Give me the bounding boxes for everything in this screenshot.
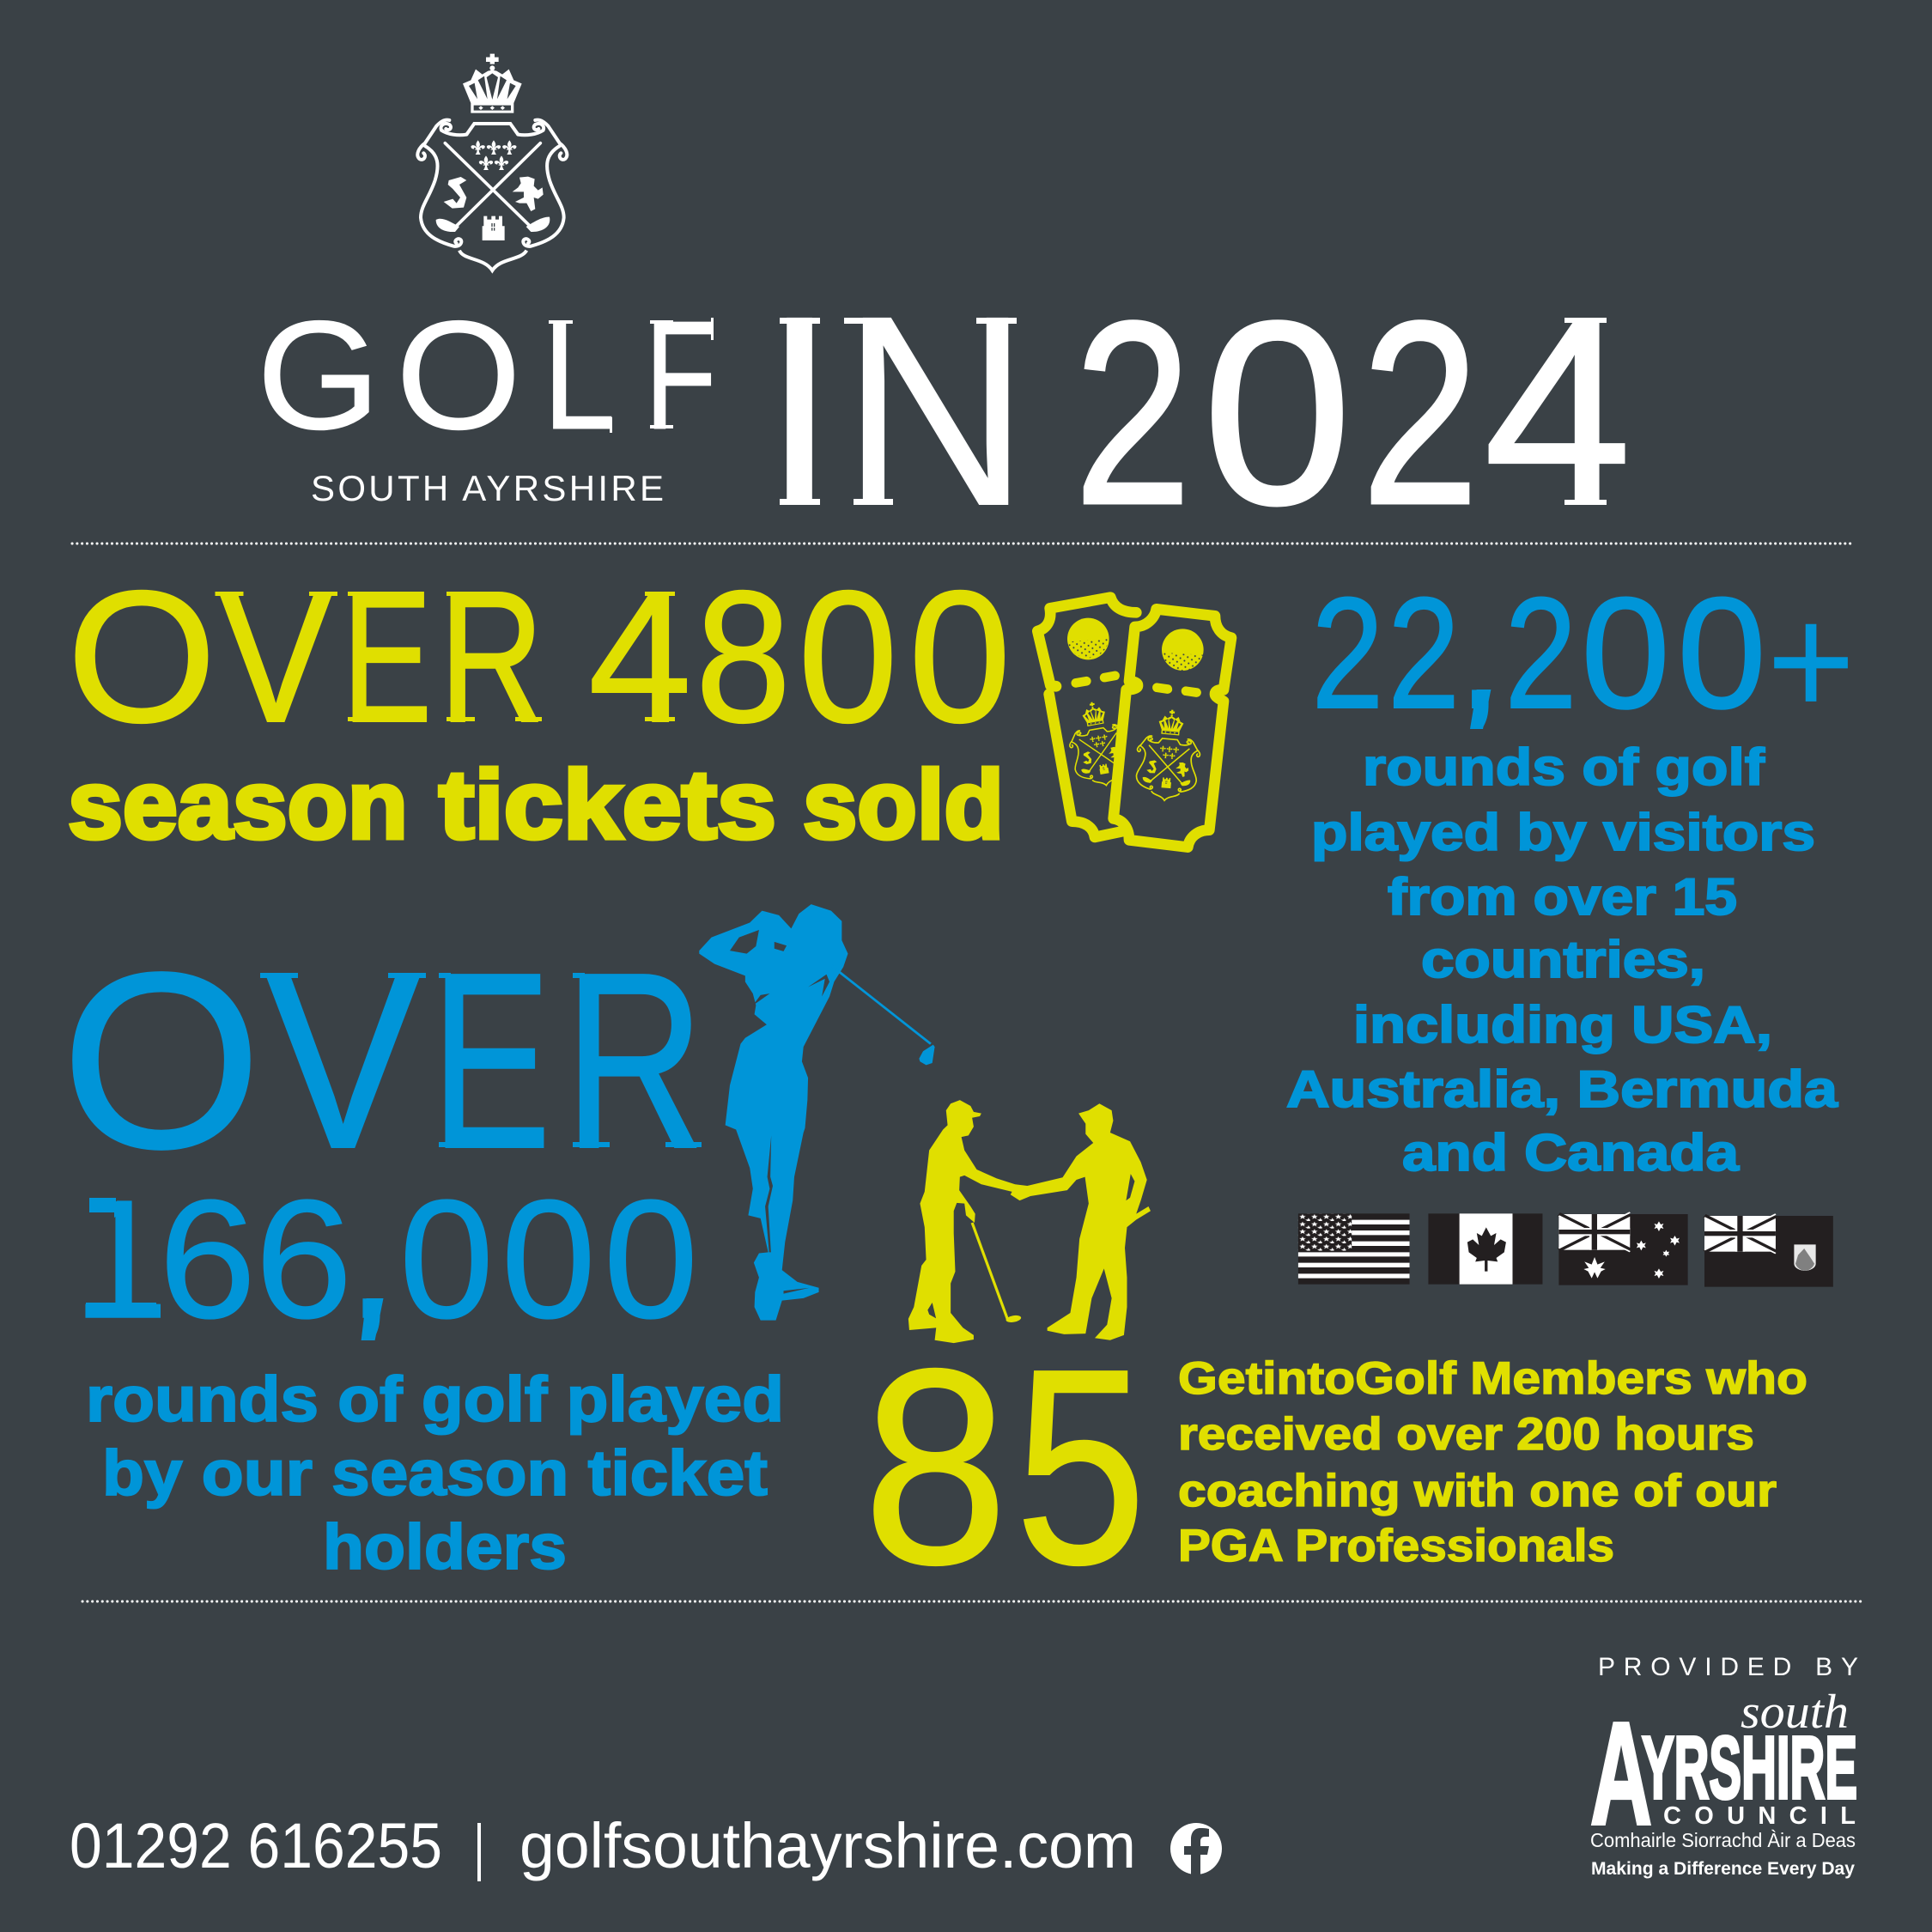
- headline: over: V: [265, 920, 422, 1200]
- headline: over 4800: O: [67, 553, 216, 762]
- headline: over: E: [431, 920, 551, 1200]
- caption: visitor rounds of golf: and Canada: [1402, 1124, 1740, 1182]
- headline: over 4800: R: [440, 553, 544, 762]
- caption: season tickets sold: season: [68, 750, 408, 859]
- stat: getintogolf coaching: [863, 1311, 1807, 1622]
- logo word: council: COUNCIL: [1663, 1802, 1856, 1830]
- gaelic name: Comhairle Siorrachd Àir a Deas: [1590, 1829, 1856, 1851]
- caption: visitor rounds of golf: countries,: [1421, 931, 1705, 988]
- caption: visitor rounds of golf: rounds of golf: [1363, 738, 1765, 796]
- caption: rounds played by season ticket holders: by our season ticket: [102, 1437, 768, 1509]
- flag: Australia: [1558, 1212, 1688, 1285]
- caption: getintogolf members: GetintoGolf Members who: [1178, 1353, 1807, 1404]
- slogan: Making a Difference Every Day: [1591, 1859, 1855, 1879]
- caption: visitor rounds of golf: from over 15: [1388, 868, 1737, 926]
- headline: 22,200+: 2: [1504, 564, 1577, 741]
- title logo: Golf South Ayrshire: [257, 289, 717, 508]
- ticket: front: [1114, 609, 1231, 848]
- headline: over: R: [564, 920, 705, 1200]
- logo word: GOLF: O: [396, 289, 521, 462]
- headline number: 166,000: [73, 1165, 698, 1353]
- flag: USA: [1298, 1213, 1410, 1285]
- flag: Bermuda: [1704, 1214, 1833, 1287]
- caption: season tickets sold: tickets: [439, 750, 776, 859]
- caption: rounds played by season ticket holders: rounds of golf played: [86, 1364, 784, 1435]
- headline number: 166,000: 0: [501, 1165, 596, 1353]
- title year: 2024: [1074, 268, 1631, 559]
- headline: 22,200+: 2: [1312, 564, 1383, 741]
- title year: 2024: 0: [1202, 268, 1352, 559]
- logo word: GOLF: L: [543, 289, 616, 462]
- illustration: woman golfer silhouette: [699, 904, 935, 1321]
- logo word: GOLF: F: [645, 289, 717, 462]
- label: provided by: PROVIDED BY: [1598, 1653, 1858, 1681]
- headline number: 166,000: 1: [73, 1165, 168, 1353]
- icon: facebook: [1170, 1823, 1222, 1874]
- headline: over 4800: 4: [588, 553, 691, 762]
- logo subtitle: SOUTH AYRSHIRE: [311, 468, 664, 508]
- caption: getintogolf members: PGA Professionals: [1178, 1521, 1614, 1571]
- stat: season ticket rounds: [61, 920, 784, 1583]
- caption: visitor rounds of golf: Australia, Bermuda: [1286, 1060, 1838, 1118]
- caption: rounds played by season ticket holders: holders: [323, 1511, 567, 1583]
- caption: visitor rounds of golf: played by visitors: [1311, 804, 1815, 861]
- headline: over 4800: 0: [799, 553, 898, 762]
- flag: Canada: [1428, 1213, 1542, 1285]
- title year: 2024: 4: [1484, 268, 1631, 559]
- headline number: 166,000: ,: [348, 1165, 394, 1353]
- flags row: [1298, 1212, 1833, 1287]
- caption: season tickets sold: [68, 750, 1004, 859]
- caption: visitor rounds of golf: including USA,: [1353, 996, 1772, 1054]
- headline: 22,200+: [1312, 564, 1856, 749]
- headline: 22,200+: +: [1767, 572, 1856, 749]
- caption: rounds played by season ticket holders: [86, 1364, 784, 1583]
- caption: getintogolf members: [1178, 1353, 1807, 1571]
- title word: IN: N: [841, 259, 1030, 563]
- title year: 2024: 2: [1362, 268, 1479, 559]
- icon: two season tickets: [1037, 598, 1231, 848]
- icon: golf south ayrshire crest: [417, 54, 567, 270]
- website: golfsouthayrshire.com: [519, 1810, 1136, 1881]
- headline number: 166,000: 0: [399, 1165, 494, 1353]
- headline number: 166,000: 6: [159, 1165, 256, 1353]
- stat: season tickets: [67, 553, 1011, 859]
- logo word: south: south: [1741, 1686, 1849, 1739]
- caption: season tickets sold: sold: [803, 750, 1004, 859]
- stat: visitor rounds: [1286, 564, 1856, 1182]
- logo word: GOLF: [257, 289, 717, 462]
- headline: 22,200+: 0: [1677, 564, 1766, 741]
- headline: over 4800: 0: [908, 553, 1011, 762]
- headline: over 4800: [67, 553, 1011, 762]
- caption: visitor rounds of golf: [1286, 738, 1838, 1182]
- headline: 22,200+: 0: [1581, 564, 1670, 741]
- title: in 2024: [762, 259, 1631, 563]
- headline: 22,200+: ,: [1458, 564, 1502, 741]
- phone number: 01292 616255: [70, 1810, 442, 1881]
- headline: over 4800: E: [342, 553, 432, 762]
- title year: 2024: 2: [1074, 268, 1192, 559]
- title word: IN: I: [762, 259, 837, 563]
- logo letter: large A: A: [1590, 1692, 1652, 1856]
- headline: over: [61, 920, 705, 1200]
- ticket: back: [1037, 598, 1136, 837]
- logo word: GOLF: G: [257, 289, 380, 462]
- separator: [477, 1823, 481, 1881]
- headline number: 166,000: 0: [604, 1165, 698, 1353]
- caption: getintogolf members: received over 200 hours: [1178, 1409, 1754, 1460]
- headline: 22,200+: 2: [1388, 564, 1460, 741]
- headline: over: O: [61, 920, 262, 1200]
- caption: getintogolf members: coaching with one of our: [1178, 1466, 1777, 1516]
- title word: IN: [762, 259, 1030, 563]
- number: 85: [863, 1311, 1146, 1622]
- footer contact details: [70, 1810, 1222, 1881]
- headline: over 4800: V: [219, 553, 332, 762]
- number: 85: 8: [863, 1311, 1008, 1622]
- headline: over 4800: 8: [696, 553, 791, 762]
- provider: South Ayrshire Council logo: [1590, 1653, 1858, 1879]
- number: 85: 5: [1015, 1311, 1146, 1622]
- headline number: 166,000: 6: [255, 1165, 352, 1353]
- illustration: two golfers shaking hands: [908, 1100, 1151, 1343]
